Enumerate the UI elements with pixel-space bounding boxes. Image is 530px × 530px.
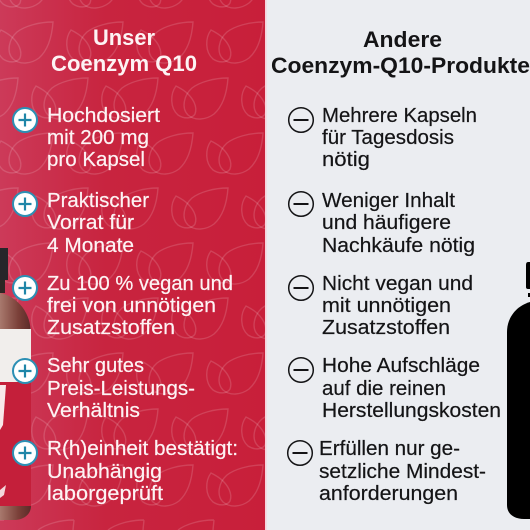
heading: Unser Coenzym Q10: Unser bbox=[93, 25, 155, 50]
drawback: Mehrere Kapseln: Mehrere Kapseln bbox=[322, 104, 477, 127]
icon: minus 5 bbox=[288, 441, 312, 465]
product bottle: black silhouette bbox=[507, 262, 530, 519]
benefit: Preis-Leistung: Verhältnis bbox=[47, 399, 140, 422]
drawback: Nicht vegan: mit unnötigen bbox=[322, 294, 451, 317]
heading: Andere Coenzym-Q10-Produkte bbox=[271, 27, 530, 78]
icon: minus 1 bbox=[289, 108, 313, 132]
benefit: Praktischer Vorrat bbox=[47, 189, 149, 257]
benefit: Hochdosiert: pro Kapsel bbox=[47, 148, 145, 171]
drawback: Nicht vegan: Zusatzstoffen bbox=[322, 316, 450, 339]
icon: minus 3 bbox=[289, 276, 313, 300]
drawback: Weniger Inhalt: Nachkäufe nötig bbox=[322, 234, 475, 257]
drawback: Nicht vegan: Nicht vegan und bbox=[322, 272, 473, 295]
benefit: vegan: frei von unnötigen bbox=[47, 294, 216, 317]
drawback: Hohe Aufschläge: Herstellungskosten bbox=[322, 399, 501, 422]
icon: plus 5 bbox=[13, 441, 37, 465]
benefit: Praktischer Vorrat: Praktischer bbox=[47, 189, 149, 212]
drawback: Mehrere Kapseln: für Tagesdosis bbox=[322, 126, 454, 149]
drawback: Mindestanforderungen: anforderungen bbox=[319, 482, 458, 505]
panel edge highlight bbox=[265, 0, 267, 530]
benefit: Hochdosiert: Hochdosiert bbox=[47, 104, 160, 127]
benefit: vegan: Zusatzstoffen bbox=[47, 316, 175, 339]
benefit: Praktischer Vorrat: Vorrat für bbox=[47, 211, 134, 234]
icon: plus 4 bbox=[13, 359, 37, 383]
heading: Unser Coenzym Q10: Coenzym Q10 bbox=[51, 51, 197, 76]
icon: plus 3 bbox=[13, 276, 37, 300]
benefit: laborgeprüft bbox=[47, 437, 238, 505]
benefit: Hochdosiert bbox=[47, 104, 160, 171]
drawback: Hohe Aufschläge bbox=[322, 354, 501, 422]
benefit: Preis-Leistung: Sehr gutes bbox=[47, 354, 144, 377]
heading: Andere Coenzym-Q10-Produkte: Coenzym-Q10-Produkte bbox=[271, 53, 530, 78]
benefit: laborgeprüft: laborgeprüft bbox=[47, 482, 163, 505]
benefit: laborgeprüft: Unabhängig bbox=[47, 460, 162, 483]
heading: Unser Coenzym Q10 bbox=[51, 25, 197, 76]
drawback: Nicht vegan bbox=[322, 272, 473, 339]
drawback: Weniger Inhalt bbox=[322, 189, 475, 257]
drawback: Hohe Aufschläge: Hohe Aufschläge bbox=[322, 354, 480, 377]
icon: minus 2 bbox=[289, 192, 313, 216]
drawback: Weniger Inhalt: Weniger Inhalt bbox=[322, 189, 455, 212]
panel: andere Produkte (light grey) bbox=[265, 0, 530, 530]
benefit: vegan: Zu 100 % vegan und bbox=[47, 272, 233, 295]
benefit: laborgeprüft: R(h)einheit bestätigt: bbox=[47, 437, 238, 460]
icon: plus 2 bbox=[13, 192, 37, 216]
drawback: Mindestanforderungen bbox=[319, 437, 486, 505]
drawback: Mehrere Kapseln bbox=[322, 104, 477, 171]
benefit: vegan bbox=[47, 272, 233, 339]
benefit: Preis-Leistung: Preis-Leistungs- bbox=[47, 377, 195, 400]
icon: minus 4 bbox=[289, 358, 313, 382]
drawback: Mindestanforderungen: Erfüllen nur ge- bbox=[319, 437, 460, 460]
drawback: Mindestanforderungen: setzliche Mindest- bbox=[319, 460, 486, 483]
benefit: Praktischer Vorrat: 4 Monate bbox=[47, 234, 134, 257]
drawback: Weniger Inhalt: und häufigere bbox=[322, 211, 451, 234]
benefit: Hochdosiert: mit 200 mg bbox=[47, 126, 149, 149]
drawback: Hohe Aufschläge: auf die reinen bbox=[322, 377, 446, 400]
panel: unser Coenzym Q10 (red) bbox=[0, 0, 265, 530]
benefit: Preis-Leistung bbox=[47, 354, 195, 422]
drawback: Mehrere Kapseln: nötig bbox=[322, 148, 370, 171]
icon: plus 1 bbox=[13, 108, 37, 132]
product bottle: left bbox=[0, 248, 31, 520]
heading: Andere Coenzym-Q10-Produkte: Andere bbox=[363, 27, 442, 52]
